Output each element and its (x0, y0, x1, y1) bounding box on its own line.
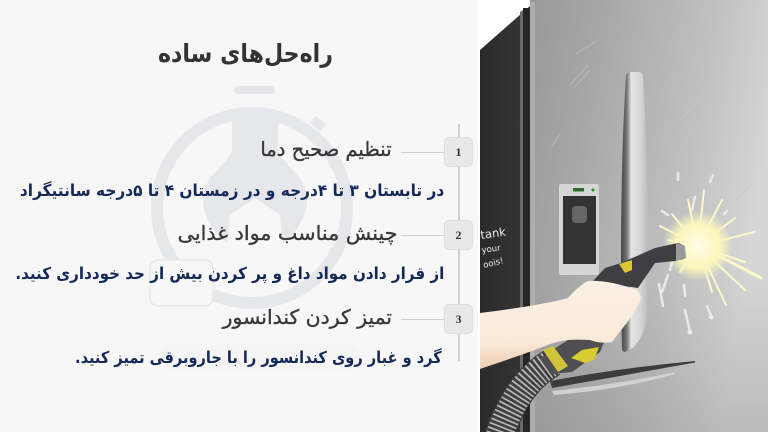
step 1 description: در تابستان ۳ تا ۴درجه و در زمستان ۴ تا ۵درجه سانتیگراد (20, 181, 444, 200)
chalk writing: your (481, 243, 502, 256)
timeline vertical line (458, 124, 460, 361)
step 3 number badge: 3 (456, 312, 462, 326)
title: راه‌حل‌های ساده (158, 39, 333, 68)
arm and hand (480, 281, 641, 369)
step 1 connector (401, 152, 444, 153)
vacuum handle (540, 243, 686, 374)
water dispenser (559, 184, 599, 275)
step 2 number badge: 2 (456, 228, 462, 242)
watermark: wrench stopwatch icon (150, 86, 353, 309)
step 3 description: گرد و غبار روی کندانسور را با جاروبرقی تمیز کنید. (75, 348, 442, 367)
fridge side panel (478, 0, 535, 432)
spark burst (659, 173, 761, 334)
step 2 number badge (444, 220, 473, 250)
fridge handle (621, 72, 648, 352)
hose (499, 362, 553, 432)
door gap (550, 361, 695, 388)
step 3 number badge (444, 304, 473, 334)
door scratches (552, 41, 752, 200)
step 2 description: از قرار دادن مواد داغ و پر کردن بیش از حد خودداری کنید. (15, 264, 444, 283)
photo: vacuuming a refrigerator (479, 0, 768, 432)
step 1 number badge (444, 137, 473, 167)
step 3 connector (401, 319, 444, 320)
chalk writing: tank (479, 225, 507, 242)
step 3 heading: تمیز کردن کندانسور (223, 305, 392, 329)
step 2 heading: چینش مناسب مواد غذایی (177, 221, 397, 245)
chalk writing: oois! (482, 256, 505, 271)
step 1 number badge: 1 (456, 145, 462, 159)
step 1 heading: تنظیم صحیح دما (261, 137, 392, 161)
step 2 connector (401, 235, 444, 236)
chalk writing (479, 225, 507, 271)
